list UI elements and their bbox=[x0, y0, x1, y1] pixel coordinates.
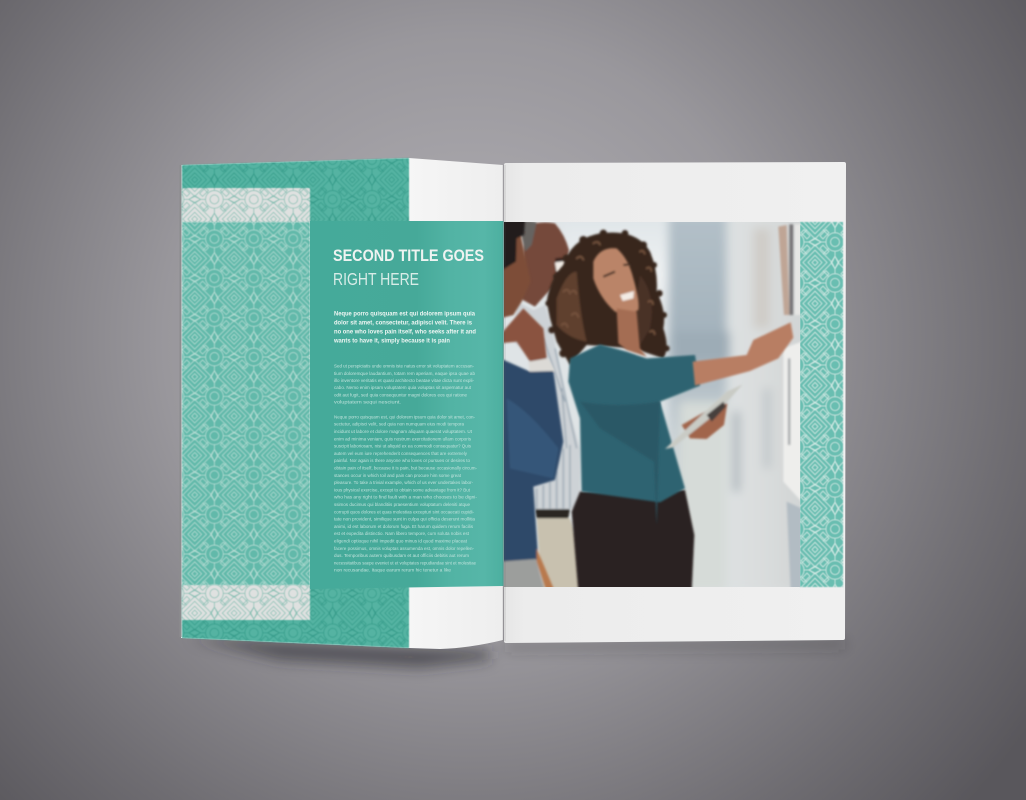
photo background: blurred shelves and aisle bbox=[650, 222, 800, 587]
body paragraph 1: tium doloremque laudantium, totam rem aperiam, eaque ipsa quae ab bbox=[334, 371, 475, 376]
body paragraph 2: eligendi optioque nihil impedit quo minus id quod maxime placeat bbox=[334, 538, 468, 544]
tablet and hand bbox=[665, 384, 743, 449]
body paragraph 2: Neque porro quisquam est, qui dolorem ipsum quia dolor sit amet, con- bbox=[334, 414, 475, 419]
lead paragraph: wants to have it, simply because it is pain bbox=[333, 338, 450, 344]
body paragraph 2: pleasure. To take a trivial example, which of us ever undertakes labor- bbox=[334, 480, 473, 485]
body paragraph 1: voluptatem sequi nesciunt. bbox=[334, 400, 401, 405]
body paragraph 2: corrupti quos dolores et quas molestias excepturi sint occaecati cupidi- bbox=[334, 509, 474, 514]
body paragraph 1 bbox=[334, 364, 475, 405]
lead paragraph: no one who loves pain itself, who seeks after it and bbox=[334, 328, 476, 336]
top pattern band bbox=[182, 158, 409, 222]
teal text panel bbox=[310, 221, 504, 589]
lead paragraph: Neque porro quisquam est qui dolorem ipsum quia bbox=[334, 310, 475, 318]
body paragraph 2: tate non provident, similique sunt in culpa qui officia deserunt mollitia bbox=[334, 517, 476, 522]
body paragraph 2: sectetur, adipisci velit, sed quia non numquam eius modi tempora bbox=[334, 422, 464, 427]
body paragraph 2 bbox=[334, 414, 478, 573]
shelf details bbox=[778, 224, 802, 590]
top light pattern strip bbox=[182, 188, 310, 222]
body paragraph 1: illo inventore veritatis et quasi architecto beatae vitae dicta sunt expli- bbox=[334, 378, 475, 383]
body paragraph 2: necessitatibus saepe eveniet ut et voluptates repudiandae sint et molestiae bbox=[334, 560, 476, 565]
body paragraph 2: animi, id est laborum et dolorum fuga. Et harum quidem rerum facilis bbox=[334, 524, 474, 529]
body paragraph 2: painful. Nor again is there anyone who loves or pursues or desires to bbox=[334, 458, 470, 463]
shirt stripes bbox=[537, 338, 577, 508]
body paragraph 2: incidunt ut labore et dolore magnam aliquam quaerat voluptatem. Ut bbox=[334, 429, 473, 434]
woman trousers bbox=[572, 490, 694, 592]
woman blouse bbox=[568, 344, 700, 502]
body paragraph 2: non recusandae. Itaque earum rerum hic tenetur a like bbox=[334, 568, 452, 573]
bottom pattern band bbox=[182, 585, 409, 648]
lead paragraph bbox=[333, 310, 476, 344]
body paragraph 2: dus. Temporibus autem quibusdam et aut officiis debitis aut rerum bbox=[334, 553, 469, 558]
body paragraph 2: who has any right to find fault with a man who chooses to be digni- bbox=[334, 495, 478, 500]
right page bbox=[500, 162, 846, 643]
body paragraph 1: odit aut fugit, sed quia consequuntur magni dolores eos qui ratione bbox=[334, 392, 467, 397]
man in striped shirt bbox=[513, 221, 580, 592]
body paragraph 2: obtain pain of itself, because it is pain, but because occasionally circum- bbox=[334, 466, 477, 470]
body paragraph 2: est et expedita distinctio. Nam libero tempore, cum soluta nobis est bbox=[334, 531, 470, 536]
gutter shadow bbox=[502, 165, 506, 641]
body paragraph 1: Sed ut perspiciatis unde omnis iste natus error sit voluptatem accusan- bbox=[334, 364, 474, 369]
title bbox=[333, 247, 484, 289]
body paragraph 2: suscipit laboriosam, nisi ut aliquid ex ea commodi consequatur? Quis bbox=[334, 444, 472, 449]
title line 2: RIGHT HERE bbox=[333, 269, 419, 289]
title line 1: SECOND TITLE GOES bbox=[333, 247, 484, 265]
page edge bbox=[180, 165, 182, 637]
left page bbox=[180, 158, 504, 649]
page base bbox=[504, 162, 846, 643]
body paragraph 2: ious physical exercise, except to obtain some advantage from it? But bbox=[334, 487, 471, 492]
woman hair bbox=[545, 230, 670, 365]
vertical pattern strip bbox=[800, 222, 843, 587]
man in blue sweater bbox=[500, 220, 563, 592]
lead paragraph: dolor sit amet, consectetur, adipisci velit. There is bbox=[334, 320, 472, 326]
bottom light pattern strip bbox=[182, 585, 310, 620]
woman face and arm bbox=[593, 248, 793, 386]
left pattern column bbox=[182, 222, 310, 586]
page base with white corners bbox=[181, 158, 503, 649]
body paragraph 2: ssimos ducimus qui blanditiis praesentium voluptatum deleniti atque bbox=[334, 502, 470, 507]
body paragraph 2: autem vel eum iure reprehenderit consequences that are extremely bbox=[334, 451, 468, 456]
body paragraph 2: enim ad minima veniam, quis nostrum exercitationem ullam corporis bbox=[334, 436, 472, 441]
woman bbox=[545, 230, 793, 592]
body paragraph 1: cabo. Nemo enim ipsam voluptatem quia voluptas sit aspernatur aut bbox=[334, 385, 472, 390]
body paragraph 2: stances occur in which toil and pain can procure him some great bbox=[334, 473, 462, 478]
photo: three colleagues looking at a shelf bbox=[500, 215, 807, 592]
body paragraph 2: facere possimus, omnis voluptas assumenda est, omnis dolor repellen- bbox=[334, 546, 474, 551]
shadow under the brochure bbox=[190, 638, 845, 668]
